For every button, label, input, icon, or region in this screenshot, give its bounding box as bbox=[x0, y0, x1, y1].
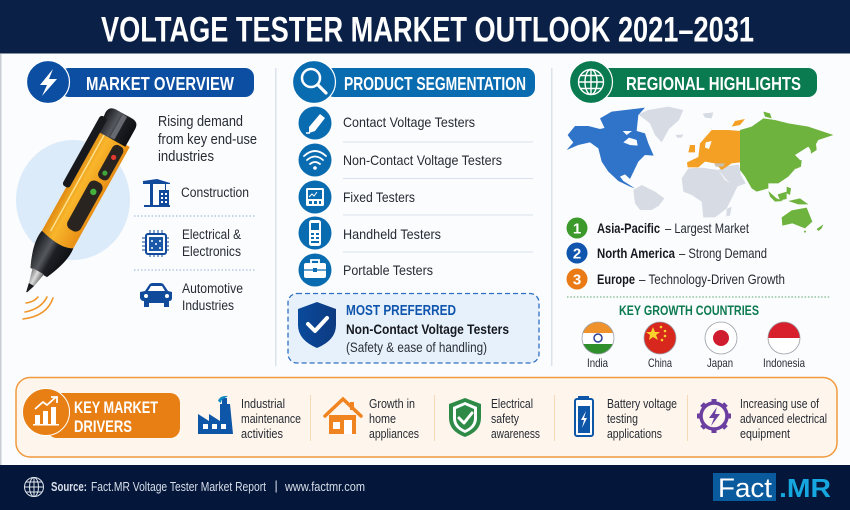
label: increasing use of advanced electrical equipment: equipment bbox=[740, 427, 790, 441]
ranking: asia-pacific: – Largest Market bbox=[665, 220, 749, 236]
icon: portable case bbox=[298, 254, 332, 286]
text: rising demand: from key end-use bbox=[158, 132, 257, 148]
ranking: asia-pacific: 1 bbox=[573, 220, 581, 238]
heading: key market drivers: DRIVERS bbox=[74, 418, 132, 436]
icon: fixed tester bbox=[298, 180, 332, 214]
icon: car bbox=[140, 283, 172, 307]
label: contact voltage testers: Contact Voltage Testers bbox=[343, 114, 475, 130]
label: handheld testers: Handheld Testers bbox=[343, 226, 441, 242]
ranking: europe bbox=[566, 268, 785, 290]
ranking: north america: 2 bbox=[573, 246, 581, 262]
label: electrical safety awareness: Electrical bbox=[491, 397, 533, 411]
icon: contact tester bbox=[298, 106, 332, 140]
ranking: north america bbox=[566, 242, 767, 264]
driver: home appliances bbox=[325, 397, 419, 441]
icon: gear with bolt bbox=[697, 399, 731, 433]
logo: fact.mr: .MR bbox=[779, 473, 831, 503]
icon: factory bbox=[198, 396, 233, 434]
footer bbox=[0, 465, 850, 510]
label: industrial maintenance activities bbox=[241, 397, 301, 441]
label: construction: Construction bbox=[181, 185, 249, 200]
flag: japan: Japan bbox=[707, 356, 733, 370]
ranking: europe: 3 bbox=[573, 272, 581, 288]
text: rising demand: Rising demand bbox=[158, 114, 243, 130]
label: growth in home appliances: home bbox=[369, 412, 396, 426]
driver: industrial maintenance bbox=[198, 396, 301, 441]
driver: electrical safety bbox=[449, 397, 540, 441]
label: electrical and electronics bbox=[182, 227, 241, 259]
panel: key market drivers bbox=[16, 378, 837, 457]
illustration: voltage tester pen bbox=[8, 104, 143, 319]
logo: fact.mr bbox=[713, 473, 831, 503]
driver: advanced equipment bbox=[697, 397, 827, 441]
icon: electronics chip bbox=[142, 230, 170, 257]
source line bbox=[51, 479, 365, 494]
label: increasing use of advanced electrical equipment: advanced electrical bbox=[740, 412, 827, 426]
heading: product segmentation: PRODUCT SEGMENTATION bbox=[344, 74, 526, 94]
flag: china: China bbox=[648, 356, 672, 370]
callout: most preferred: (Safety & ease of handling) bbox=[346, 339, 487, 355]
icon: non-contact wifi bbox=[298, 144, 332, 176]
icon: shield check bbox=[298, 302, 336, 348]
ranking: asia-pacific bbox=[566, 218, 749, 238]
flag: indonesia bbox=[763, 322, 805, 370]
heading: market overview: MARKET OVERVIEW bbox=[86, 74, 234, 94]
source line: Fact.MR Voltage Tester Market Report bbox=[91, 480, 266, 494]
label: increasing use of advanced electrical equipment: Increasing use of bbox=[740, 397, 819, 411]
panel: regional highlights bbox=[566, 60, 833, 370]
label: electrical safety awareness bbox=[491, 397, 540, 441]
label: fixed testers: Fixed Testers bbox=[343, 189, 415, 205]
callout: most preferred bbox=[288, 294, 539, 363]
title banner bbox=[0, 0, 850, 54]
panel: market overview bbox=[8, 60, 257, 319]
flag: india bbox=[582, 322, 614, 370]
label: automotive industries bbox=[182, 281, 243, 313]
heading: product segmentation bbox=[292, 60, 535, 104]
label: portable testers: Portable Testers bbox=[343, 262, 433, 278]
label: industrial maintenance activities: Industrial bbox=[241, 397, 285, 411]
label: electrical and electronics: Electronics bbox=[182, 244, 241, 259]
icon: handheld tester bbox=[298, 216, 332, 250]
text: rising demand: industries bbox=[158, 149, 214, 165]
label: growth in home appliances bbox=[369, 397, 419, 441]
label: industrial maintenance activities: activities bbox=[241, 427, 283, 441]
source line: Source: bbox=[51, 480, 87, 494]
panel: product segmentation bbox=[288, 60, 539, 363]
source line: www.factmr.com bbox=[284, 480, 365, 494]
flag: japan bbox=[705, 322, 737, 370]
label: electrical and electronics: Electrical & bbox=[182, 227, 241, 242]
label: electrical safety awareness: awareness bbox=[491, 427, 540, 441]
label: battery voltage testing applications: Battery voltage bbox=[607, 397, 677, 411]
label: battery voltage testing applications: testing bbox=[607, 412, 638, 426]
icon: battery bbox=[575, 396, 593, 436]
logo: fact.mr: Fact bbox=[718, 473, 773, 503]
flag: china bbox=[644, 322, 676, 370]
callout: most preferred: Non-Contact Voltage Testers bbox=[346, 321, 509, 337]
label: battery voltage testing applications bbox=[607, 397, 677, 441]
world map bbox=[567, 107, 833, 233]
heading: key market drivers: KEY MARKET bbox=[74, 399, 158, 417]
icon: globe bbox=[24, 478, 44, 496]
ranking: europe: Europe bbox=[597, 271, 635, 287]
label: electrical safety awareness: safety bbox=[491, 412, 520, 426]
heading: key market drivers bbox=[22, 388, 180, 438]
label: increasing use of advanced electrical equipment bbox=[740, 397, 827, 441]
label: battery voltage testing applications: applications bbox=[607, 427, 662, 441]
icon: construction bbox=[143, 179, 170, 207]
ranking: europe: – Technology-Driven Growth bbox=[639, 271, 785, 287]
icon: house bbox=[325, 399, 361, 434]
flag: indonesia: Indonesia bbox=[763, 356, 805, 370]
icon: green shield bbox=[449, 398, 481, 437]
heading: market overview bbox=[26, 60, 254, 104]
ranking: north america: North America bbox=[597, 245, 675, 261]
ranking: north america: – Strong Demand bbox=[679, 245, 767, 261]
label: growth in home appliances: appliances bbox=[369, 427, 419, 441]
ranking: asia-pacific: Asia-Pacific bbox=[597, 220, 660, 236]
heading: key growth countries: KEY GROWTH COUNTRIES bbox=[619, 302, 759, 318]
label: automotive industries: Industries bbox=[182, 298, 234, 313]
label: automotive industries: Automotive bbox=[182, 281, 243, 296]
callout: most preferred: MOST PREFERRED bbox=[346, 303, 456, 319]
heading: regional highlights bbox=[570, 60, 817, 104]
source line: | bbox=[274, 479, 278, 493]
driver: battery testing bbox=[575, 396, 677, 441]
flag: india: India bbox=[587, 356, 608, 370]
label: growth in home appliances: Growth in bbox=[369, 397, 415, 411]
label: industrial maintenance activities: maintenance bbox=[241, 412, 301, 426]
text: rising demand bbox=[158, 114, 257, 165]
label: non-contact voltage testers: Non-Contact Voltage Testers bbox=[343, 152, 502, 168]
heading: regional highlights: REGIONAL HIGHLIGHTS bbox=[626, 74, 801, 94]
